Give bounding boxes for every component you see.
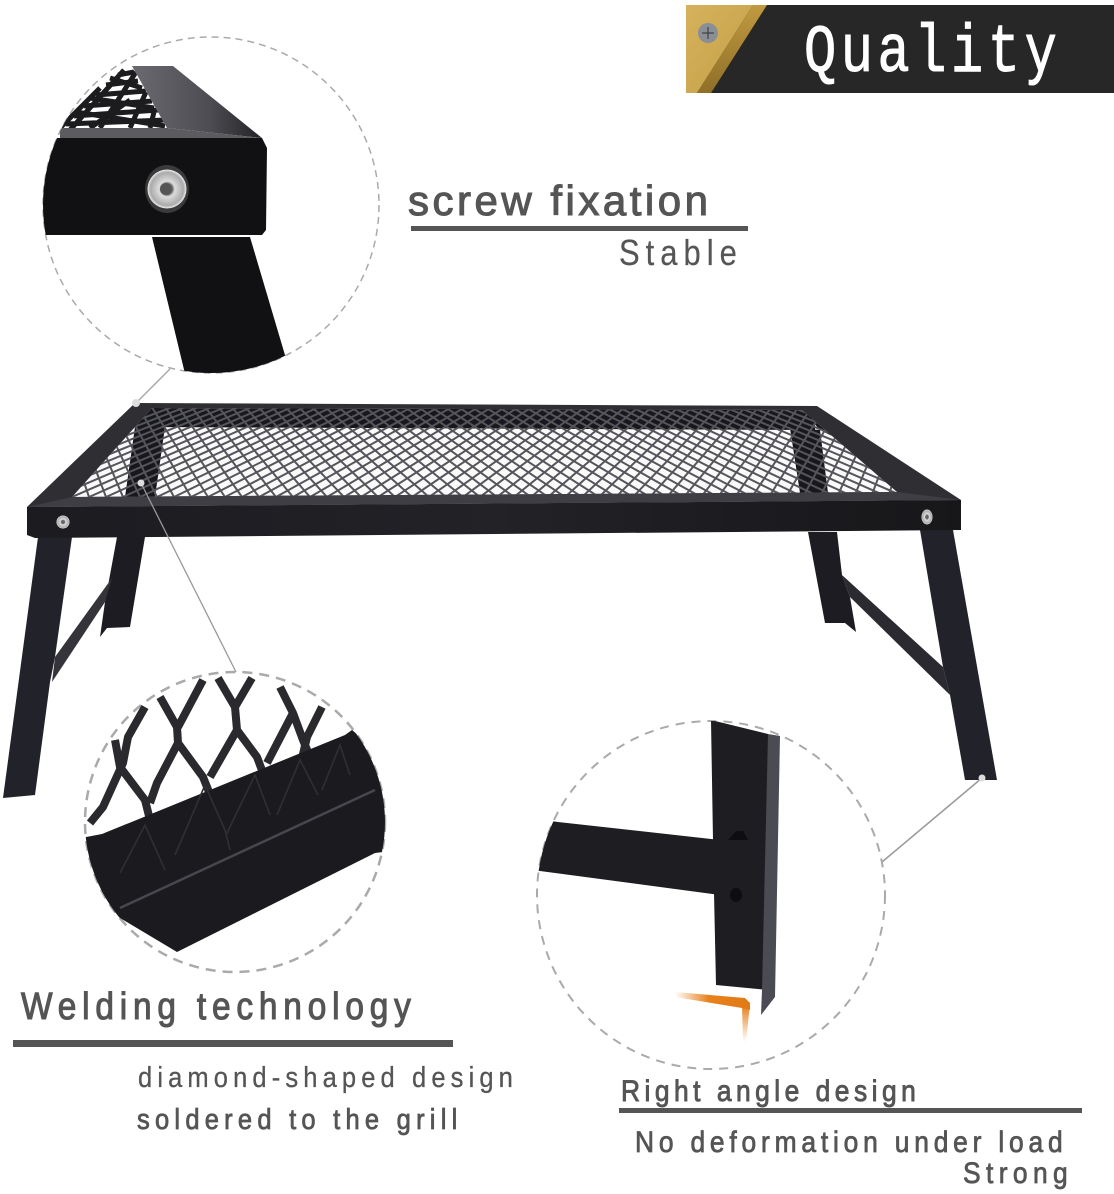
connector: weld circle [138, 480, 236, 672]
horizontal brace [538, 821, 714, 894]
bar close-up [30, 66, 290, 382]
left brace [52, 578, 112, 682]
vertical leg [711, 720, 768, 990]
diamond mesh family B [72, 408, 892, 497]
back right leg [808, 532, 856, 632]
right brace [842, 575, 950, 695]
left rivet [56, 516, 70, 528]
front left leg [3, 537, 72, 798]
heading: Right angle design [621, 1073, 916, 1107]
icon: screw [698, 23, 718, 43]
heading: Welding technology [21, 985, 411, 1027]
icon: orange right angle marker [675, 992, 750, 1042]
detail circle: right angle [530, 720, 885, 1069]
back left leg [100, 537, 145, 637]
dashed outline [43, 37, 379, 373]
diamond mesh family A [72, 408, 896, 497]
label: right angle design [619, 1073, 1082, 1189]
connector: angle circle [882, 774, 986, 862]
description: No deformation under load [635, 1124, 1063, 1158]
description line 2: soldered to the grill [137, 1102, 457, 1135]
right rivet [922, 510, 932, 524]
welding spots [728, 831, 748, 902]
gold corner [686, 5, 753, 93]
banner title: Quality [804, 16, 1057, 92]
label: welding technology [13, 985, 513, 1135]
front rail [27, 500, 961, 538]
underline [13, 1040, 453, 1047]
emboss lines [120, 745, 350, 873]
weld band [70, 730, 400, 952]
bend ridge [120, 790, 375, 908]
banner: Quality [686, 5, 1114, 93]
underline [411, 226, 748, 231]
connector: top circle [132, 369, 170, 407]
underline [619, 1108, 1082, 1113]
dashed outline [537, 721, 885, 1069]
dashed outline [85, 672, 385, 972]
diamond strands [87, 676, 326, 826]
description line 1: diamond-shaped design [138, 1060, 513, 1093]
front rail top ledge [27, 492, 961, 507]
description: strong: Strong [963, 1155, 1068, 1189]
shadows under mesh [72, 408, 896, 497]
sub text: Stable [619, 234, 737, 274]
label: screw fixation [408, 177, 748, 274]
gold diagonal stripe [697, 5, 767, 93]
deck background [72, 408, 897, 497]
heading: screw fixation [408, 177, 708, 224]
detail circle: screw fixation [30, 37, 379, 382]
table: black mesh grill [3, 403, 997, 798]
frame top rails [27, 403, 961, 507]
front right leg [920, 530, 997, 780]
detail circle: welding [70, 672, 400, 972]
leg side face [761, 734, 780, 1015]
